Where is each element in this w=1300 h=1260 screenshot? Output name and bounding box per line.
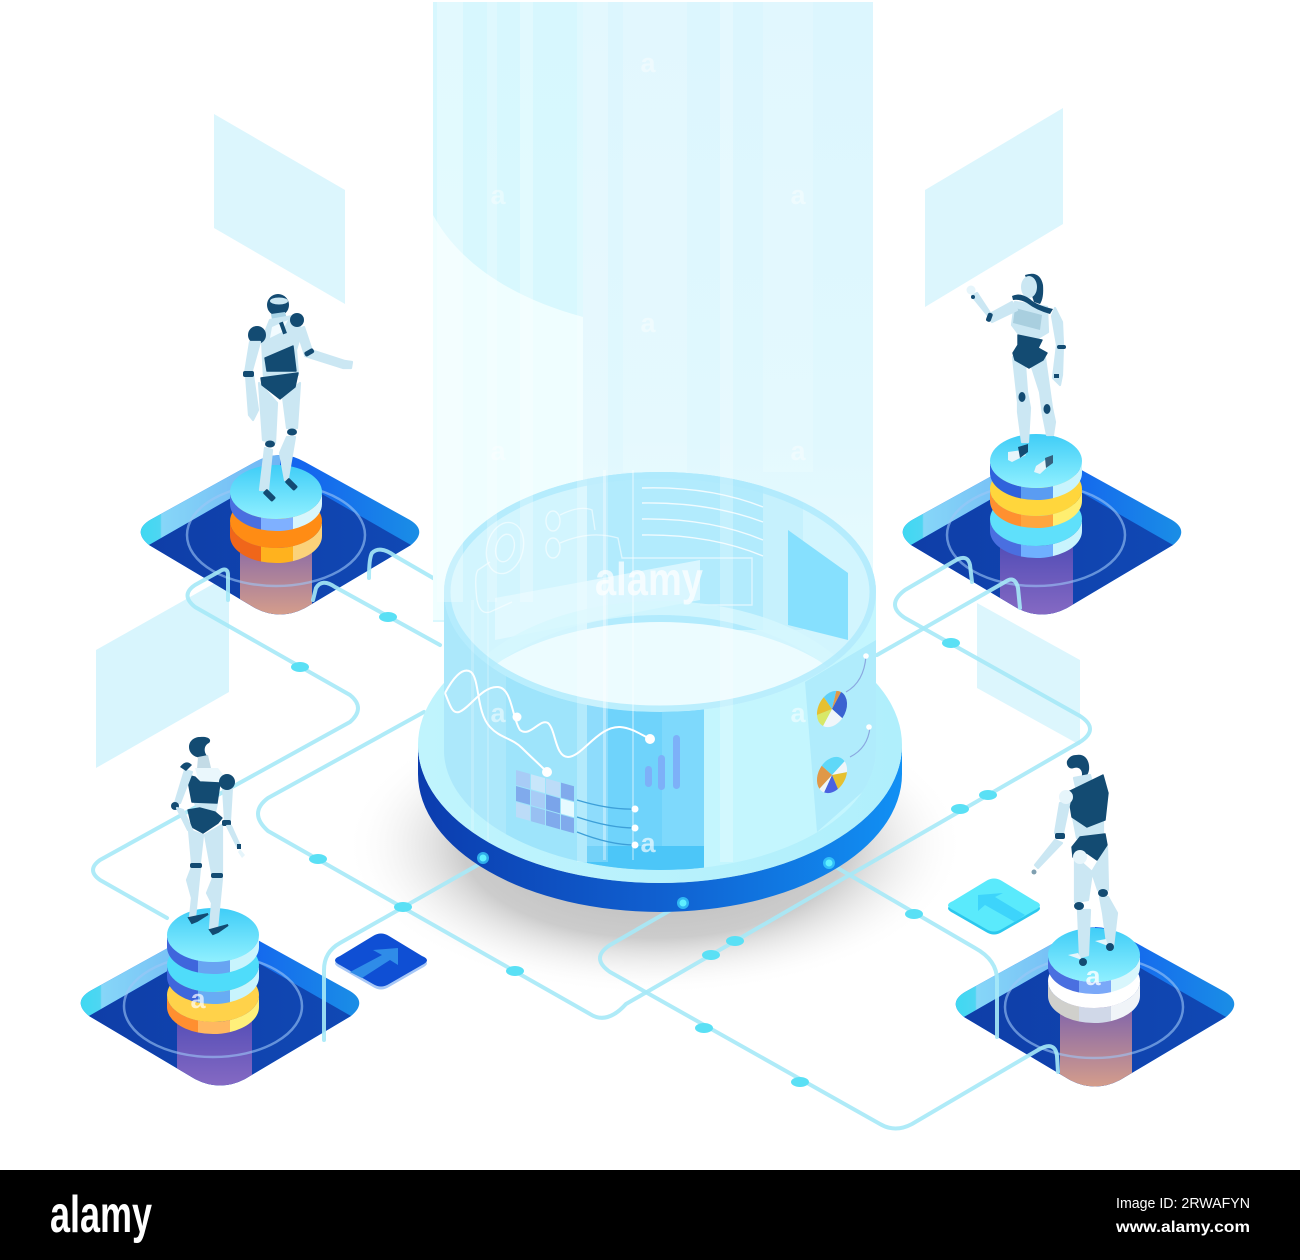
glass ring body [444,472,876,870]
panel: floating screen top left [214,114,345,304]
watermark: repeated a marks: a [790,698,806,728]
watermark: repeated a marks: a [640,48,656,78]
watermark: repeated a marks: a [1085,961,1101,991]
watermark: repeated a marks: a [490,436,506,466]
stack: bottom right [1048,928,1140,1023]
stack: top right [990,434,1082,558]
central base disc [418,607,902,912]
stack: top left [230,465,322,563]
heatmap grid on ring [516,770,574,833]
connector lines network [93,550,1090,1128]
pie chart upper [811,686,853,732]
far wall diagram outlines [476,508,752,612]
pie connector lines [846,653,872,757]
bar chart on ring [645,735,680,790]
robot: top left [243,294,352,502]
watermark: repeated a marks [190,48,1101,1014]
light tower beam [433,2,873,622]
arrow tile: dark blue [335,934,427,990]
arrow tile: cyan [948,878,1040,934]
drop shadow under central disc [345,695,965,995]
watermark: repeated a marks: a [640,308,656,338]
platform: bottom left [80,940,360,1086]
watermark: repeated a marks: a [490,180,506,210]
watermark: repeated a marks: a [640,828,656,858]
platform: top right [902,469,1182,614]
pie chart lower [811,752,853,798]
platform: top left [141,455,419,622]
watermark: repeated a marks: a [790,436,806,466]
ring interior: far wall [444,472,876,712]
far wall text lines [642,488,763,556]
footer url: www.alamy.com [1115,1219,1250,1236]
ring near wall [444,590,876,880]
panel: floating screen top right [925,108,1063,307]
robot: top right [966,274,1066,474]
line chart curves on ring [445,671,655,777]
tower light stripes [437,2,813,862]
robot: bottom right [1032,755,1117,966]
watermark: repeated a marks: a [790,180,806,210]
panel: floating screen left [96,575,229,768]
stack: bottom left [167,908,259,1034]
platform: bottom right [956,927,1234,1094]
connector nodes [291,612,997,1087]
footer image id: Image ID: 2RWAFYN [1116,1195,1250,1212]
watermark: repeated a marks: a [190,984,206,1014]
footer band [0,1170,1300,1260]
footer logo: alamy [50,1186,152,1244]
robot: bottom left [171,737,245,934]
panel: floating screen right [977,603,1080,745]
watermark: alamy wordmark: alamy [595,553,703,605]
watermark: repeated a marks: a [490,698,506,728]
legend lines with dots on ring [577,800,638,848]
